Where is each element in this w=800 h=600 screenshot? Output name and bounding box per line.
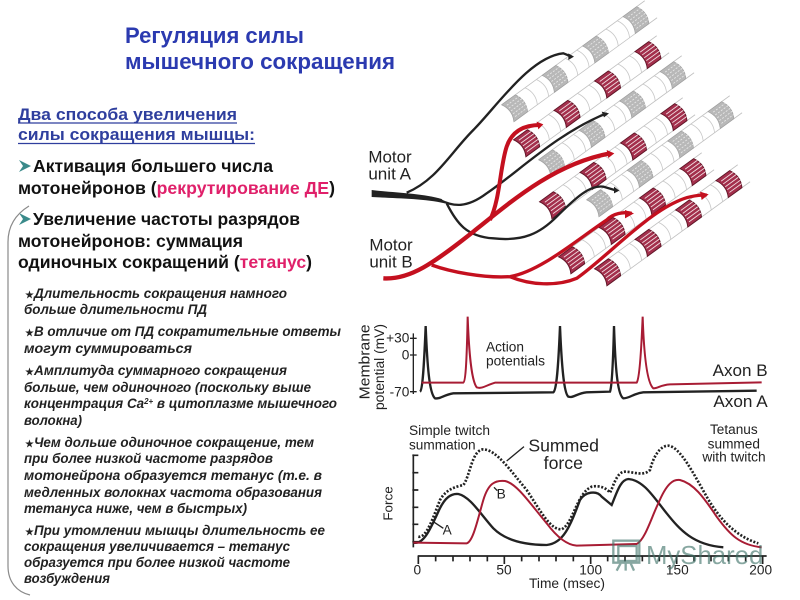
label: tetanus summed with twitch: summed — [708, 436, 760, 451]
charts — [357, 317, 772, 591]
time axis labels: 50 — [496, 562, 512, 577]
label: axon B: Axon B — [713, 361, 768, 380]
y axis labels: +30 — [386, 331, 410, 346]
y axis and ticks — [410, 333, 417, 394]
note 2 — [24, 324, 341, 356]
heading: two ways to increase force: Два способа увеличения — [18, 106, 237, 124]
note 1: больше длительности ПД — [24, 302, 207, 317]
bullet: discharge frequency: Увеличение частоты разрядов — [33, 209, 300, 229]
heading: two ways to increase force — [18, 106, 255, 144]
motor unit A label: unit A — [368, 164, 412, 183]
note 1 — [24, 286, 287, 317]
bullet: motor neuron recruitment: мотонейронов (рекрутирование ДЕ) — [18, 178, 335, 198]
bullet: motor neuron recruitment — [18, 156, 335, 198]
note 3 — [24, 363, 337, 428]
note 3: больше, чем одиночного (поскольку выше — [24, 380, 311, 395]
force axis — [412, 454, 418, 547]
note 4 — [24, 435, 322, 516]
bullet: discharge frequency: мотонейронов: суммация — [18, 231, 243, 251]
motor unit B axons — [383, 122, 709, 284]
note 4: при более низкой частоте разрядов — [24, 451, 273, 466]
note 4: ★Чем дольше одиночное сокращение, тем — [25, 435, 314, 450]
label: action potentials — [486, 340, 545, 369]
note 3: концентрация Ca — [24, 396, 145, 411]
label: summed force: Summed — [528, 436, 599, 456]
time axis labels: 200 — [749, 562, 772, 577]
label: action potentials: potentials — [486, 354, 545, 369]
label: summed force — [528, 436, 599, 473]
note 5 — [24, 523, 325, 586]
note 3: волокна) — [24, 413, 82, 428]
time axis labels: 100 — [579, 562, 602, 577]
y axis labels — [357, 324, 410, 410]
heading: two ways to increase force: силы сокращения мышцы: — [18, 126, 255, 144]
watermark text: MyShared — [646, 540, 763, 570]
italic notes list — [24, 286, 341, 586]
motor unit A label — [368, 147, 412, 183]
nerves and labels — [368, 53, 709, 284]
note 3: ★Амплитуда суммарного сокращения — [25, 363, 287, 378]
label: A: A — [443, 523, 453, 538]
bullet: discharge frequency: одиночных сокращений (тетанус) — [18, 252, 312, 272]
motor unit B label: Motor — [369, 236, 413, 255]
y axis labels: 0 — [402, 347, 410, 362]
motor unit B label: unit B — [369, 252, 413, 271]
leader lines — [433, 447, 524, 528]
note 5: ★При утомлении мышцы длительность ее — [25, 523, 325, 538]
label: summed force: force — [544, 453, 583, 473]
note 4: медленных волокнах частота образования — [24, 485, 322, 500]
bullet: motor neuron recruitment: Активация большего числа — [33, 156, 273, 176]
note 2: могут суммироваться — [24, 341, 192, 356]
label: axon A: Axon A — [713, 392, 768, 411]
chart: force over time — [381, 422, 772, 591]
note 3: в цитоплазме мышечного — [153, 396, 337, 411]
time axis labels: Time (msec) — [529, 576, 605, 591]
label: tetanus summed with twitch: with twitch — [701, 450, 766, 465]
time axis labels: 0 — [414, 562, 422, 577]
watermark — [613, 540, 763, 571]
title: Регуляция силы — [125, 23, 304, 48]
note 1: ★Длительность сокращения намного — [25, 286, 287, 301]
time axis — [418, 556, 767, 564]
diagram: muscle fibers and motor units — [368, 1, 750, 286]
fibers — [502, 1, 750, 286]
bullet: discharge frequency — [18, 209, 312, 272]
note 5: образуется при более низкой частоте — [24, 555, 290, 570]
summed force dotted curve — [418, 446, 758, 543]
note 3: 2+ — [143, 397, 153, 406]
label: tetanus summed with twitch: Tetanus — [710, 422, 758, 437]
note 4: тетануса ниже, чем в быстрых) — [24, 501, 247, 516]
note 5: сокращения увеличивается – тетанус — [24, 539, 290, 554]
watermark icon — [613, 541, 639, 571]
y axis labels: Membrane — [357, 324, 373, 399]
label: simple twitch summation — [409, 423, 490, 452]
bracket — [8, 206, 30, 595]
label: B: B — [497, 486, 506, 501]
note 4: мотонейрона образуется тетанус (т.е. в — [24, 468, 322, 483]
label: tetanus summed with twitch — [701, 422, 766, 465]
label: simple twitch summation: summation — [409, 437, 476, 452]
title — [125, 23, 395, 74]
motor unit A label: Motor — [368, 147, 412, 166]
time axis labels: 150 — [666, 562, 689, 577]
force axis label: Force — [381, 486, 396, 521]
chart: action potentials — [357, 317, 768, 411]
note 2: ★В отличие от ПД сократительные ответы — [25, 324, 341, 339]
axon B trace — [422, 317, 762, 388]
twitch A curve — [413, 479, 723, 547]
label: action potentials: Action — [486, 340, 524, 355]
note 5: возбуждения — [24, 571, 110, 586]
y axis labels: potential (mV) — [372, 324, 387, 410]
time axis labels — [414, 562, 772, 591]
y axis labels: -70 — [390, 385, 410, 400]
motor unit B label — [369, 236, 413, 271]
title: мышечного сокращения — [125, 49, 395, 74]
axon A trace — [420, 326, 757, 398]
label: simple twitch summation: Simple twitch — [409, 423, 490, 438]
motor unit A axons — [372, 53, 619, 239]
twitch B curve — [413, 480, 762, 547]
